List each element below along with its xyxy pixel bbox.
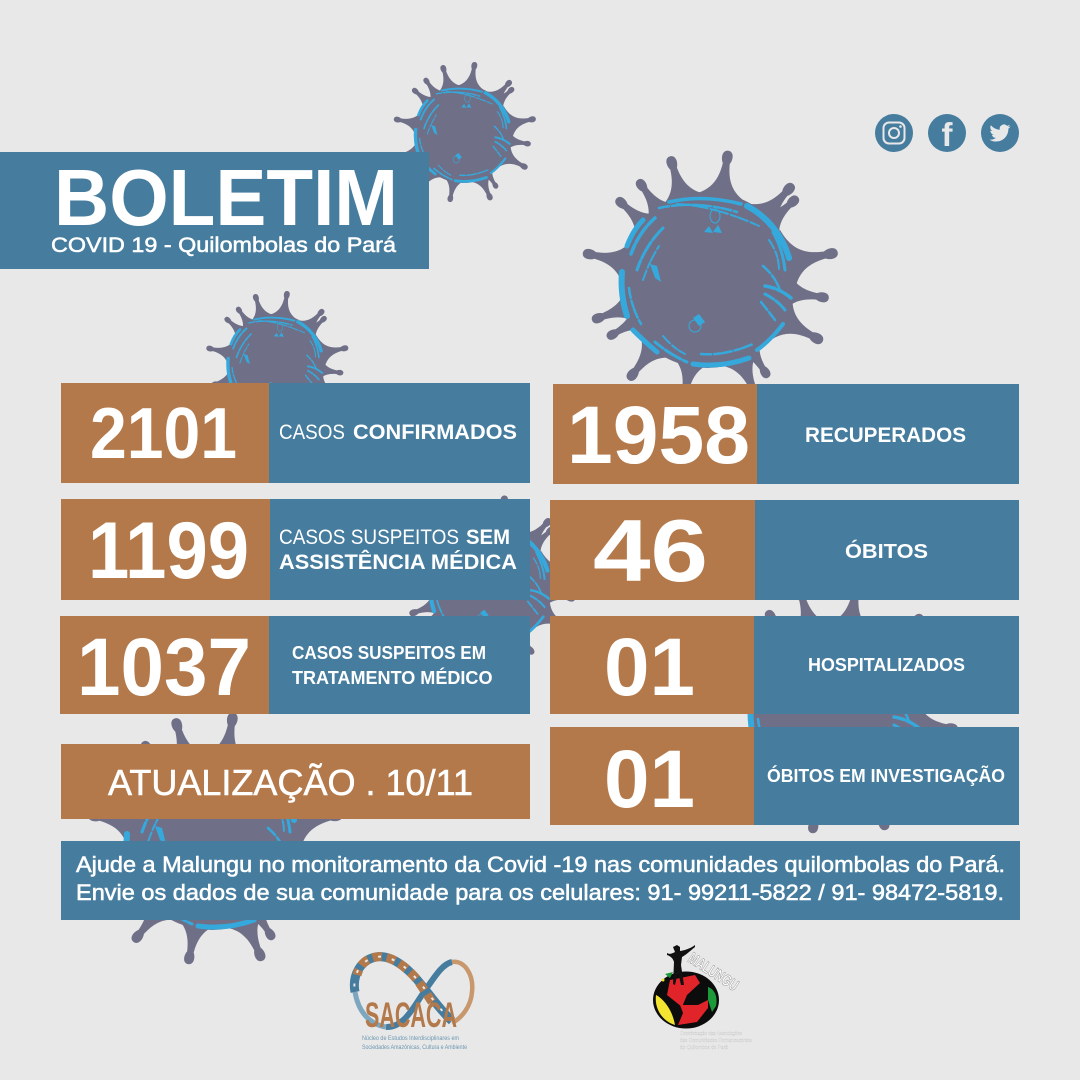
label: casos suspeitos sem assistência médica: SEM — [466, 526, 510, 549]
icon: twitter — [981, 114, 1019, 152]
wordmark: SACACA — [365, 996, 457, 1035]
panel: call to action — [61, 841, 1020, 920]
label: casos confirmados — [279, 421, 517, 444]
number: 1199: 1199 — [88, 506, 249, 596]
virus illustration: large right — [576, 145, 845, 412]
panel: casos confirmados — [61, 383, 530, 483]
label: óbitos: ÓBITOS — [845, 539, 928, 563]
panel: óbitos — [550, 500, 1019, 600]
virus illustration: bottom right — [705, 576, 974, 843]
Malungu tagline: Coordenação das Associações — [680, 1031, 742, 1037]
call to action text: Ajude a Malungu no monitoramento da Covid -19 nas comunidades quilombolas do Pará. — [76, 852, 1005, 877]
logo: Malungu — [653, 945, 752, 1051]
panel: hospitalizados — [550, 616, 1019, 714]
virus illustration: left small — [202, 288, 352, 436]
Malungu tagline: de Quilombos do Pará — [680, 1045, 729, 1051]
infinity emblem — [354, 957, 472, 1027]
virus illustration: top small — [390, 59, 540, 207]
label: casos suspeitos sem assistência médica: ASSISTÊNCIA MÉDICA — [279, 550, 517, 574]
subtitle: COVID 19 - Quilombolas do Pará — [51, 233, 396, 257]
tagline: Núcleo de Estudos Interdisciplinares em — [362, 1035, 459, 1042]
icon: facebook — [928, 114, 966, 153]
social icons — [875, 114, 1019, 153]
call to action text: Envie os dados de sua comunidade para os celulares: 91- 99211-5822 / 91- 98472-5819. — [76, 880, 1004, 905]
Malungu tagline — [680, 1031, 752, 1051]
icon: facebook: f — [942, 116, 954, 153]
call to action text — [76, 852, 1005, 905]
icon: instagram — [875, 114, 913, 152]
label: óbitos em investigação: ÓBITOS EM INVESTIGAÇÃO — [767, 765, 1005, 786]
number: 1958: 1958 — [567, 390, 750, 481]
panel: atualização — [61, 744, 530, 819]
tagline: Sociedades Amazônicas, Cultura e Ambiente — [362, 1044, 467, 1051]
title: BOLETIM — [54, 153, 398, 242]
label: recuperados: RECUPERADOS — [805, 424, 966, 447]
virus illustration: centre behind panels — [398, 492, 587, 678]
number: 2101: 2101 — [90, 394, 237, 474]
silhouette figure — [667, 945, 695, 985]
panel: óbitos em investigação — [550, 727, 1019, 825]
label: casos suspeitos em tratamento médico — [292, 642, 492, 688]
logo: SACACA — [354, 957, 472, 1051]
panel: casos suspeitos em tratamento — [60, 616, 530, 714]
update date: ATUALIZAÇÃO . 10/11 — [108, 762, 473, 803]
globe — [653, 972, 719, 1028]
number: 01: 01 — [604, 734, 695, 825]
panel: recuperados — [553, 384, 1019, 484]
Malungu tagline: das Comunidades Remanescentes — [680, 1038, 752, 1044]
number: 46: 46 — [593, 501, 708, 600]
label: casos suspeitos sem assistência médica: CASOS SUSPEITOS — [279, 526, 459, 549]
virus illustration: bottom left — [81, 707, 350, 974]
tagline — [362, 1035, 467, 1051]
label: casos suspeitos sem assistência médica — [279, 526, 517, 574]
label: casos suspeitos em tratamento médico: TRATAMENTO MÉDICO — [292, 667, 492, 688]
Malungu wordmark: MALUNGU — [685, 950, 741, 995]
label: casos suspeitos em tratamento médico: CASOS SUSPEITOS EM — [292, 642, 486, 663]
label: casos confirmados: CONFIRMADOS — [353, 421, 517, 444]
label: hospitalizados: HOSPITALIZADOS — [808, 655, 965, 675]
title banner — [0, 152, 429, 269]
label: casos confirmados: CASOS — [279, 421, 345, 444]
number: 1037: 1037 — [77, 622, 251, 713]
panel: casos suspeitos sem assistência — [61, 499, 530, 600]
number: 01: 01 — [604, 622, 695, 713]
